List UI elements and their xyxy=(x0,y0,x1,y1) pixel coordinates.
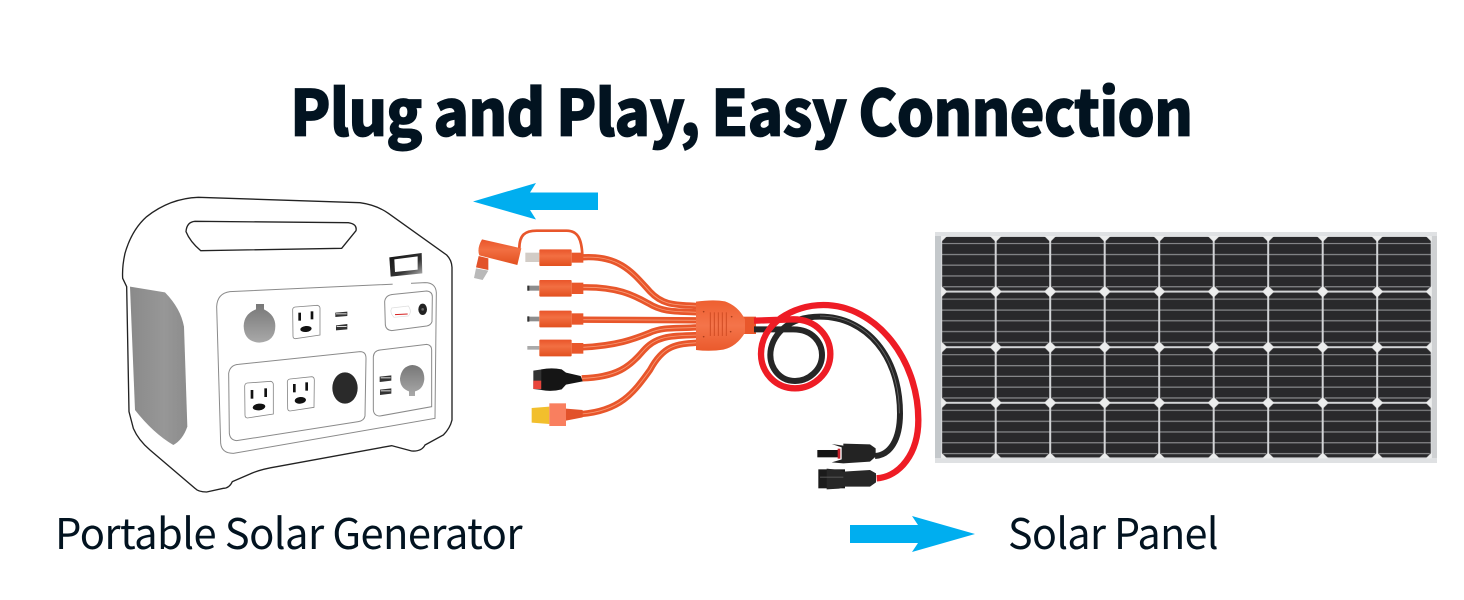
mc4 connector top xyxy=(817,444,876,463)
orange wires xyxy=(582,257,697,414)
usb ports top xyxy=(335,312,347,330)
round cap bottom xyxy=(400,365,424,396)
outlet 1 xyxy=(293,305,320,339)
cable: red and black solar leads xyxy=(754,305,918,489)
barrel connector 3 xyxy=(527,311,583,327)
cable: orange multi-connector harness xyxy=(474,231,756,426)
bottom left module xyxy=(229,352,366,441)
barrel connector 2 xyxy=(527,280,583,297)
title: Plug and Play, Easy Connection xyxy=(290,63,1192,155)
label: solar panel: Solar Panel xyxy=(1008,501,1218,562)
icon: solar panel xyxy=(935,232,1437,463)
xt60 connector xyxy=(532,403,583,426)
jumper loop xyxy=(519,231,582,255)
display screen xyxy=(389,253,422,277)
barrel connector 4 xyxy=(527,340,583,356)
hub body xyxy=(696,300,756,351)
usb ports bottom xyxy=(380,375,391,395)
right-angle adapter xyxy=(474,239,521,280)
red lead xyxy=(754,305,918,478)
dark round button xyxy=(332,372,358,404)
arrow: right xyxy=(850,516,975,552)
top right module xyxy=(385,291,432,331)
icon: portable solar generator xyxy=(123,197,452,492)
round cap top xyxy=(244,304,275,343)
anderson connector xyxy=(533,368,583,391)
side grille xyxy=(130,287,187,445)
bottom right module xyxy=(373,344,432,416)
outlet 2 xyxy=(245,381,273,418)
generator body outline xyxy=(123,197,452,492)
arrow: left xyxy=(473,183,598,220)
black lead xyxy=(754,317,900,456)
front panel outline xyxy=(217,283,436,453)
outlet 3 xyxy=(287,377,314,411)
mc4 connector bottom xyxy=(818,469,876,489)
carrying handle xyxy=(186,221,356,251)
label: portable solar generator: Portable Solar Generator xyxy=(55,501,523,562)
barrel connector 1 xyxy=(525,249,583,266)
